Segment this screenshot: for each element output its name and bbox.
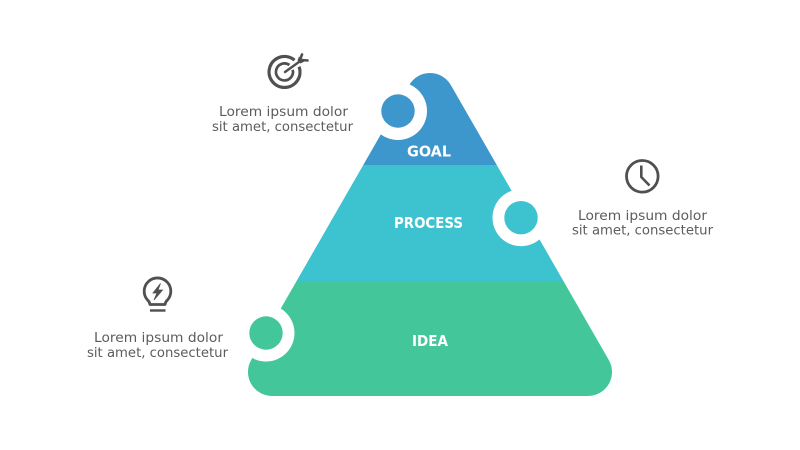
label: goal: GOAL <box>407 142 451 160</box>
text: goal description: sit amet, consectetur <box>212 120 354 135</box>
text: process description: sit amet, consectetur <box>572 224 714 238</box>
text: goal description: Lorem ipsum dolor <box>219 105 349 120</box>
pyramid <box>240 60 620 401</box>
panel: idea tier <box>240 281 620 401</box>
text: idea description: sit amet, consectetur <box>87 346 229 361</box>
icon: clock <box>626 160 658 192</box>
marker: idea <box>238 304 294 362</box>
text: process description <box>572 209 714 238</box>
text: goal description <box>212 105 354 135</box>
text: idea description: Lorem ipsum dolor <box>94 331 224 346</box>
text: idea description <box>87 331 229 361</box>
text: process description: Lorem ipsum dolor <box>578 209 708 224</box>
label: process: PROCESS <box>394 214 463 232</box>
icon: lightbulb <box>144 278 171 310</box>
icon: target <box>269 54 308 87</box>
panel: process tier <box>296 165 564 281</box>
label: idea: IDEA <box>412 332 448 350</box>
marker: process <box>492 189 550 246</box>
panel: goal tier <box>363 73 497 165</box>
marker: goal <box>369 82 427 140</box>
